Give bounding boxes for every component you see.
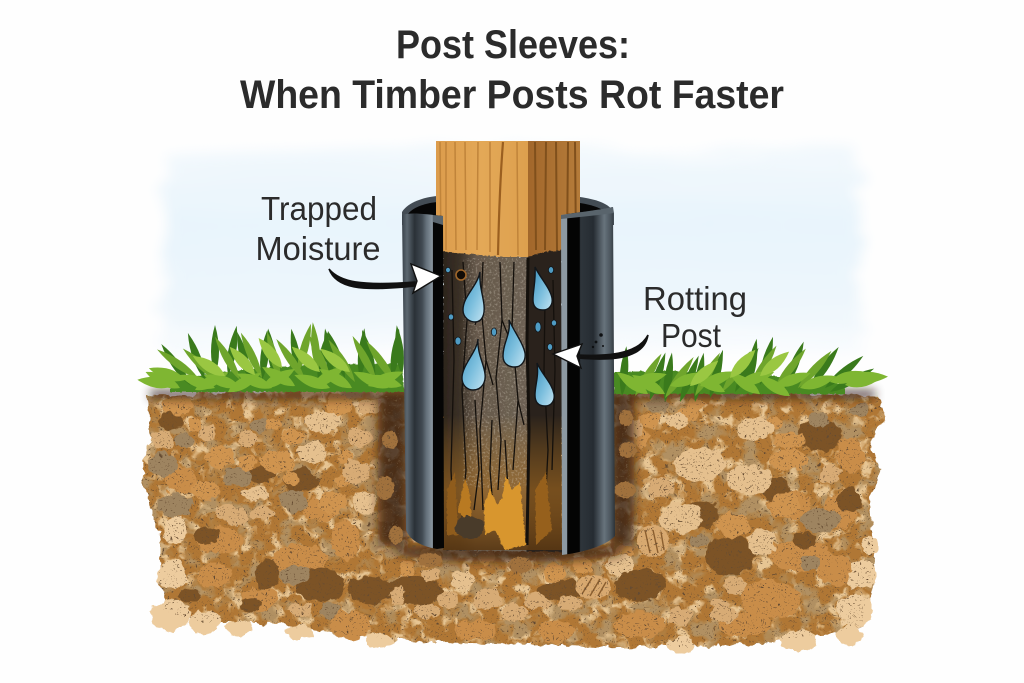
knot hole bbox=[456, 270, 466, 280]
label: Trapped Moisture bbox=[256, 190, 380, 267]
grass: left clump bbox=[137, 322, 406, 397]
arrow: to rotting post bbox=[553, 335, 648, 368]
pale highlight blobs bbox=[243, 411, 776, 590]
light tan blobs bbox=[151, 399, 841, 625]
label: Trapped Moisture: Trapped bbox=[261, 190, 377, 227]
small droplets bbox=[446, 267, 557, 350]
sleeve back rim bbox=[402, 196, 614, 225]
speckles bbox=[142, 388, 884, 648]
arrow: to trapped moisture bbox=[329, 264, 441, 293]
sleeve: right half bbox=[561, 207, 615, 555]
orange decay streaks bbox=[447, 472, 552, 550]
pale fringe bbox=[150, 516, 878, 653]
background sky wash bbox=[165, 150, 860, 355]
title: Post Sleeves: bbox=[396, 23, 630, 67]
title: When Timber Posts Rot Faster bbox=[240, 73, 784, 117]
grey-brown patches bbox=[148, 397, 869, 618]
decay dark patch bbox=[455, 515, 485, 541]
striped soil clods bbox=[575, 525, 669, 599]
dark brown patches bbox=[158, 410, 862, 612]
timber post: sound wood bbox=[436, 141, 580, 257]
mid orange bbox=[164, 437, 864, 644]
grass: right clump bbox=[614, 336, 888, 403]
soil clods near sleeve bbox=[376, 410, 637, 573]
dark soil around sleeve bbox=[150, 390, 875, 562]
orange blobs bbox=[161, 394, 807, 582]
bark cracks bbox=[451, 258, 555, 545]
sleeve: left half bbox=[402, 213, 444, 549]
title bbox=[240, 23, 784, 117]
label: Trapped Moisture: Moisture bbox=[256, 230, 380, 267]
label: Rotting Post: Post bbox=[661, 317, 721, 354]
label: Rotting Post: Rotting bbox=[643, 280, 747, 317]
water drops bbox=[446, 267, 557, 406]
label: Rotting Post bbox=[643, 280, 747, 354]
rotted post section bbox=[443, 250, 562, 552]
soil cross-section bbox=[142, 388, 884, 653]
